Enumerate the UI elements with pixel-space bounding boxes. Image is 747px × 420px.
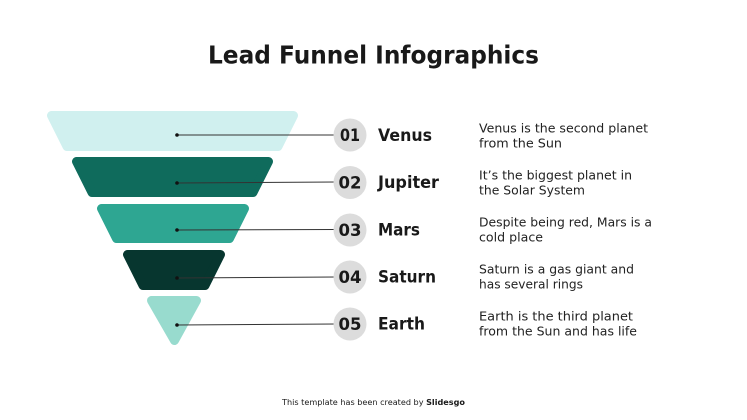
heading Venus: Venus xyxy=(378,126,432,145)
row 02: Jupiter xyxy=(175,166,632,199)
description Mars xyxy=(479,214,652,244)
heading Mars: Mars xyxy=(378,220,420,240)
description Earth xyxy=(479,308,637,338)
number badge 05: 05 xyxy=(338,315,362,335)
row 04: Saturn xyxy=(175,260,634,294)
connector line 2 xyxy=(175,181,336,185)
funnel band 3: Mars xyxy=(102,208,244,238)
funnel xyxy=(52,116,294,340)
description Earth: from the Sun and has life xyxy=(479,324,637,338)
row 01: Venus xyxy=(175,118,648,152)
number badge 03 xyxy=(334,214,366,246)
row 03: Mars xyxy=(175,214,652,246)
description Venus xyxy=(479,120,648,150)
funnel band 2: Jupiter xyxy=(76,162,268,192)
description Mars: cold place xyxy=(479,230,543,244)
description Jupiter: the Solar System xyxy=(479,182,585,198)
number badge 05 xyxy=(334,308,366,340)
description Venus: Venus is the second planet xyxy=(479,120,648,136)
number badge 01: 01 xyxy=(340,126,360,146)
description Venus: from the Sun xyxy=(479,136,562,150)
description Saturn: has several rings xyxy=(479,276,583,292)
funnel band 5: Earth xyxy=(152,300,196,340)
funnel band 1: Venus xyxy=(52,116,294,146)
row 05: Earth xyxy=(175,308,637,340)
description Saturn xyxy=(479,262,634,292)
funnel band 4: Saturn xyxy=(128,254,220,286)
description Earth: Earth is the third planet xyxy=(479,308,633,324)
heading Jupiter: Jupiter xyxy=(377,173,440,192)
connector line 1 xyxy=(175,133,336,137)
number badge 02 xyxy=(334,166,366,199)
connector line 3 xyxy=(175,228,336,232)
description Mars: Despite being red, Mars is a xyxy=(479,214,652,230)
heading Earth: Earth xyxy=(378,314,425,334)
description Jupiter: It’s the biggest planet in xyxy=(479,168,632,182)
heading Saturn: Saturn xyxy=(378,268,436,286)
number badge 04 xyxy=(334,260,366,294)
number badge 01 xyxy=(334,118,366,152)
number badge 02: 02 xyxy=(338,174,362,194)
title: Lead Funnel Infographics xyxy=(208,40,539,70)
description Saturn: Saturn is a gas giant and xyxy=(479,262,634,276)
footer credit: This template has been created by Slidesgo xyxy=(281,398,466,407)
number badge 03: 03 xyxy=(338,221,362,241)
connector line 5 xyxy=(175,323,336,327)
number badge 04: 04 xyxy=(338,268,362,288)
connector line 4 xyxy=(175,276,336,280)
description Jupiter xyxy=(479,168,632,198)
